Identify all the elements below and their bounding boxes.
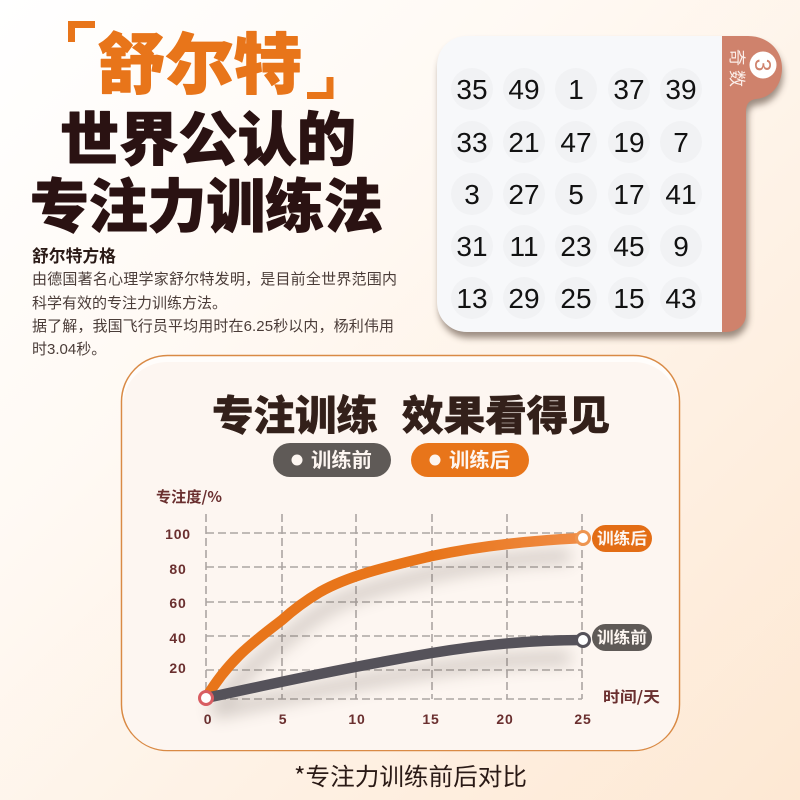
x axis labels: 0 [204,711,212,727]
x axis title: 时间/天 [603,686,660,707]
end marker: after training [576,532,590,544]
text block: description [32,243,397,358]
y axis labels: 40 [169,630,187,646]
orange curve: after training [206,538,583,698]
legend: after training [411,443,529,477]
grid numbers: 25 [560,283,592,314]
grid numbers [456,74,697,314]
grid numbers: 33 [456,127,488,158]
grid numbers: 1 [568,74,584,105]
grid numbers: 3 [464,179,480,210]
y axis labels: 80 [169,561,187,577]
title: closing bracket [307,77,330,96]
grid numbers: 45 [613,231,645,262]
title [30,12,383,244]
x axis labels: 10 [348,711,366,727]
legend: after training: 训练后 [449,444,510,473]
card face [437,36,722,332]
grid numbers: 43 [665,283,697,314]
grid numbers: 17 [613,179,645,210]
y axis labels: 100 [165,526,191,542]
origin marker [200,692,212,704]
panel heading: 效果看得见 [402,382,610,442]
grid numbers: 7 [673,127,689,158]
gray curve: before training [206,640,583,698]
grid numbers: 11 [509,231,539,262]
line chart [165,514,660,727]
title: opening bracket [72,24,95,42]
x axis labels: 5 [279,711,287,727]
grid numbers: 5 [568,179,584,210]
grid numbers: 41 [665,179,697,210]
description body: 时3.04秒。 [32,341,106,358]
title: line three: 专注力训练法 [30,160,383,244]
title: line two: 世界公认的 [60,93,356,177]
x axis labels: 20 [496,711,514,727]
legend: before training [273,443,391,477]
panel inner fill [123,362,678,750]
end label: before training: 训练前 [597,624,647,648]
grid numbers: 35 [456,74,488,105]
grid numbers: 47 [560,127,592,158]
grid numbers: 49 [508,74,540,105]
grid numbers: 23 [560,231,592,262]
caption: *专注力训练前后对比 [294,757,527,792]
card shadow [439,42,783,338]
side tab [700,36,782,332]
grid numbers: 9 [673,231,689,262]
grid numbers: 31 [456,231,488,262]
panel heading [212,382,610,442]
end label: after training: 训练后 [597,525,647,549]
description heading: 舒尔特方格 [32,243,116,267]
x axis labels: 25 [574,711,592,727]
y axis title: 专注度/% [156,486,222,507]
tab badge: 3 [750,59,776,71]
number circles [451,68,702,319]
panel heading: 专注训练 [212,382,378,442]
grid numbers: 37 [613,74,645,105]
x axis labels [204,711,592,727]
end marker: before training [576,634,590,646]
grid numbers: 39 [665,74,697,105]
title: 舒尔特: 舒尔特 [97,12,302,108]
grid numbers: 19 [613,127,645,158]
description body [32,270,397,358]
description body: 科学有效的专注力训练方法。 [32,295,227,312]
description body: 据了解，我国飞行员平均用时在6.25秒以内，杨利伟用 [32,318,394,335]
grid numbers: 27 [508,179,540,210]
tab badge [750,52,776,78]
chart grid [206,514,582,699]
grid numbers: 29 [508,283,540,314]
grid numbers: 15 [613,283,645,314]
grid numbers: 21 [508,127,540,158]
panel: number grid card [437,36,783,338]
y axis labels [165,526,191,676]
y axis labels: 20 [169,660,187,676]
grid numbers: 13 [456,283,488,314]
description body: 由德国著名心理学家舒尔特发明，是目前全世界范围内 [32,270,397,288]
curve shadows [214,556,570,714]
legend: before training: 训练前 [311,444,372,473]
x axis labels: 15 [422,711,440,727]
tab label: 奇数 [726,49,751,87]
panel: chart section [122,356,680,750]
y axis labels: 60 [169,595,187,611]
panel frame [122,356,680,750]
